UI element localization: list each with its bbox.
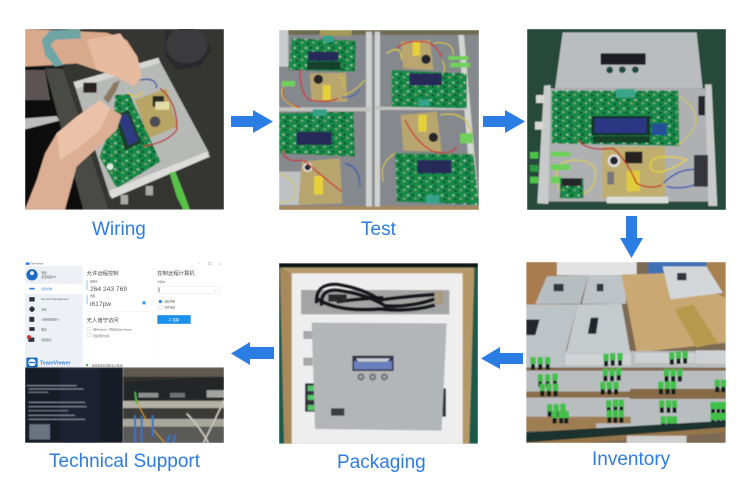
caption: Test: Test [361, 219, 397, 240]
arrow: assembly to inventory [620, 216, 643, 258]
photo: hands wiring a device [25, 29, 224, 210]
panel: wiring [25, 27, 224, 240]
screenshot: TeamViewer window [25, 260, 224, 368]
screenshot: TeamViewer window: ⌄ [213, 289, 216, 293]
panel: packaging [279, 263, 478, 473]
arrow: inventory to packaging [481, 347, 523, 369]
screenshot: TeamViewer window: TeamViewer [31, 262, 44, 266]
screenshot: TeamViewer window: 264 243 769 [90, 286, 127, 293]
screenshot: TeamViewer window: 远程控制 [164, 300, 175, 304]
screenshot: TeamViewer window: 文件传输 [164, 306, 175, 310]
screenshot: TeamViewer window: – [199, 262, 201, 266]
arrow: wiring to test [231, 110, 273, 133]
photo: four opened units under test [279, 30, 479, 210]
caption: Inventory: Inventory [592, 449, 671, 470]
photo: open chassis with lid [527, 29, 726, 210]
screenshot: TeamViewer window: 允许远程控制 [87, 269, 119, 277]
caption: Packaging: Packaging [337, 452, 426, 473]
screenshot: TeamViewer window: Remote Management [41, 297, 69, 301]
screenshot: TeamViewer window: 计算机和联系人 [41, 318, 60, 322]
screenshot: TeamViewer window: 控制远程计算机 [157, 269, 195, 277]
photo: unit packed in foam box [279, 263, 478, 444]
screenshot: TeamViewer window: 还没有账户? [41, 275, 57, 279]
panel: technical support [25, 260, 224, 472]
photo: stacked finished units [526, 262, 726, 443]
arrow: test to assembly [483, 110, 525, 133]
caption: Wiring: Wiring [92, 219, 146, 240]
screenshot: TeamViewer window: 聊天 [41, 328, 47, 332]
panel: test [279, 30, 479, 240]
screenshot: TeamViewer window: 无人值守访问 [87, 316, 119, 324]
arrow: packaging to support [231, 342, 274, 365]
screenshot: TeamViewer window: 您的ID [90, 280, 98, 284]
screenshot: TeamViewer window: 伙伴ID [157, 280, 165, 284]
screenshot: TeamViewer window: 增强现实 [41, 338, 52, 342]
screenshot: TeamViewer window: 授权轻松访问 [93, 334, 110, 338]
screenshot: TeamViewer window: ⇄ 连接 [168, 317, 180, 322]
screenshot: TeamViewer window: 随Windows一同启动TeamViewer [93, 328, 132, 332]
photo: network rack and fibers [123, 368, 224, 443]
screenshot: TeamViewer window: 会议 [41, 308, 47, 312]
screenshot: TeamViewer window: 密码 [90, 294, 96, 298]
screenshot: TeamViewer window: × [219, 262, 221, 266]
screenshot: TeamViewer window: 连接准备已就绪(安全连接) [92, 364, 123, 368]
screenshot: TeamViewer window: i617pw [90, 301, 111, 308]
screenshot and photos collage [25, 262, 224, 443]
caption: Technical Support: Technical Support [49, 451, 201, 472]
screenshot: TeamViewer window: 远程控制 [41, 287, 52, 291]
photo: terminal screen [25, 368, 123, 443]
panel: assembled unit [527, 29, 726, 210]
panel: inventory [526, 262, 726, 470]
screenshot: TeamViewer window: TeamViewer [40, 360, 71, 366]
screenshot: TeamViewer window: 登录 [41, 271, 47, 275]
